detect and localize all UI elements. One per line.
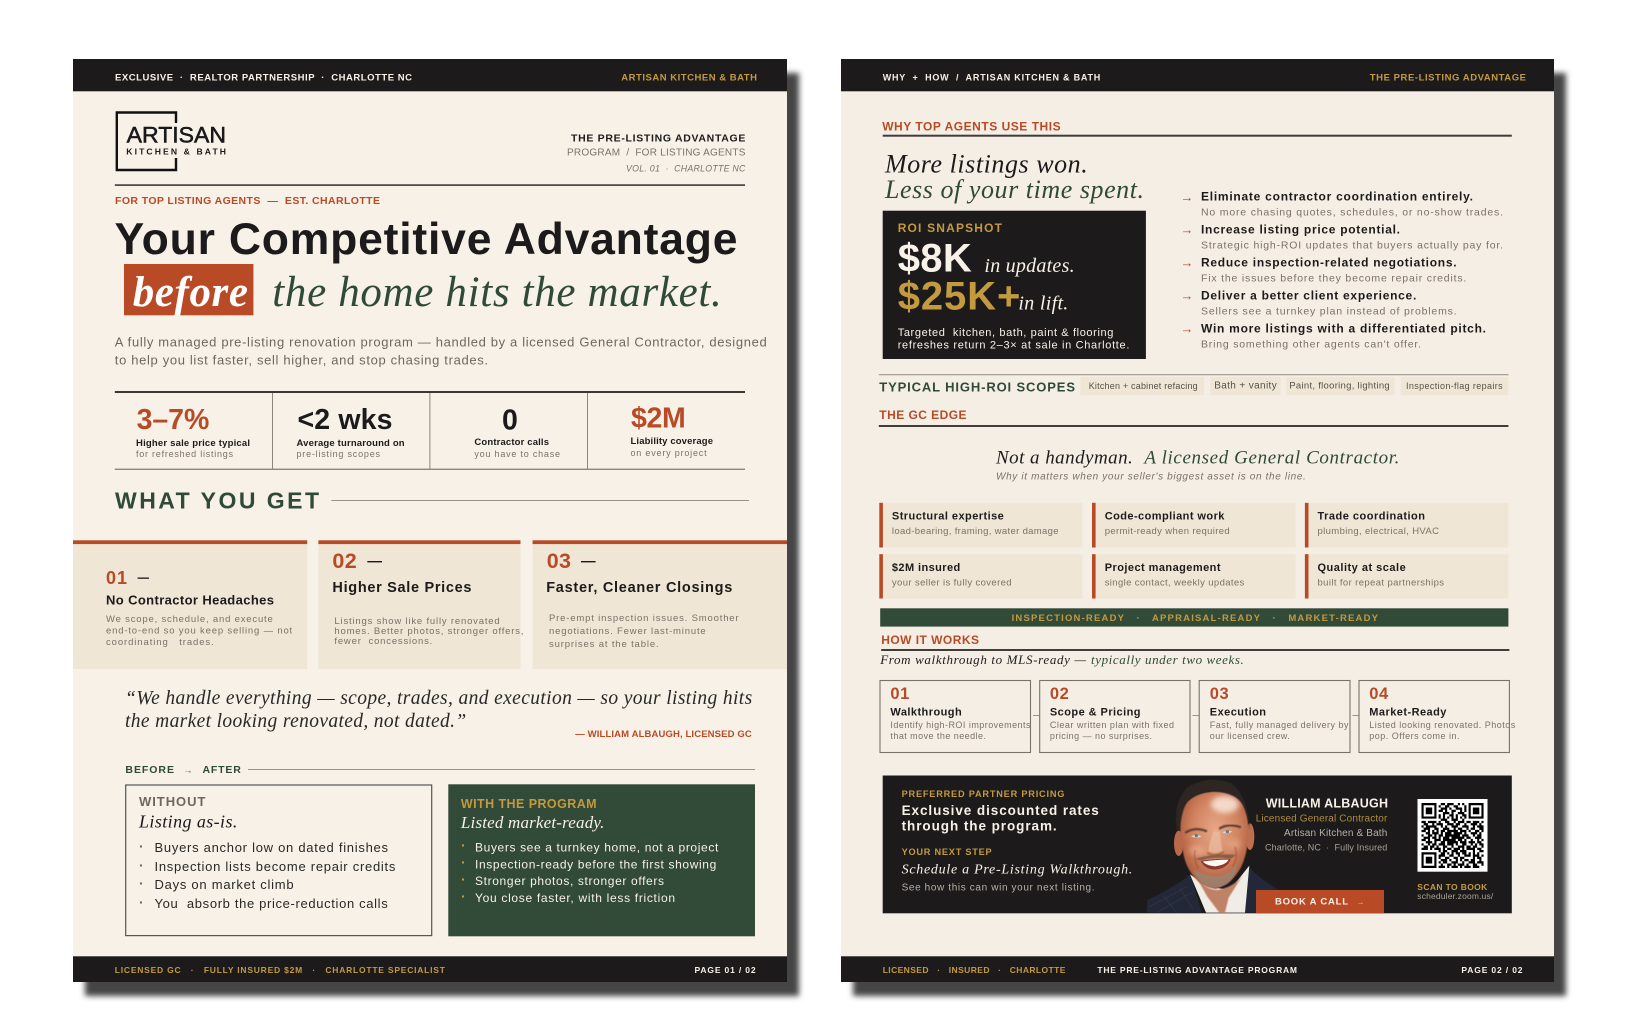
before after heading: BEFORE	[125, 764, 174, 776]
panel: ROI snapshot: $25K+	[898, 274, 1020, 318]
panel: with the program	[448, 784, 755, 936]
stat: under 2 weeks: pre-listing scopes	[296, 449, 380, 459]
bullet list: without: You absorb the price-reduction calls	[154, 896, 388, 911]
benefit 3: Reduce inspection-related negotiations.	[1201, 256, 1457, 270]
tagline: Less of your time spent.	[884, 175, 1144, 204]
step 02: Scope & Pricing	[1050, 706, 1140, 718]
scopes row	[879, 377, 1508, 395]
card 01: We scope, schedule, and execute	[106, 614, 273, 625]
stat: $2M: $2M	[631, 403, 686, 435]
masthead program text: PROGRAM / FOR LISTING AGENTS	[567, 147, 746, 158]
panel: ROI snapshot: Targeted kitchen, bath, paint & flooring	[898, 327, 1113, 339]
contact card text: Charlotte, NC · Fully Insured	[1265, 843, 1387, 853]
bullet list: without	[139, 838, 396, 911]
step 04: Listed looking renovated. Photos	[1369, 720, 1516, 730]
step 01: 01	[890, 685, 909, 703]
contact card text: Licensed General Contractor	[1256, 814, 1388, 825]
card: code: Code-compliant work	[1105, 511, 1225, 523]
card 02: 02	[332, 549, 357, 573]
bullet list: without: ·	[139, 894, 144, 910]
page 2 footer	[841, 956, 1554, 982]
scan to book caption: SCAN TO BOOK	[1417, 882, 1488, 892]
benefit 3: Fix the issues before they become repair credits.	[1201, 272, 1466, 284]
button: book a call: BOOK A CALL	[1275, 897, 1348, 908]
page 2 footer: LICENSED · INSURED · CHARLOTTE	[883, 965, 1066, 975]
bullet list: with: ·	[461, 854, 466, 870]
heading: how it works: HOW IT WORKS	[881, 633, 979, 647]
panel: ROI snapshot: refreshes return 2–3× at sale in Charlotte.	[898, 340, 1129, 352]
benefit 1: Eliminate contractor coordination entirely.	[1201, 190, 1473, 204]
step 03: Execution	[1210, 706, 1266, 718]
card 02: Listings show like fully renovated	[334, 616, 500, 627]
scope chip: bath: Bath + vanity	[1214, 381, 1277, 392]
card: insured: $2M insured	[892, 562, 960, 574]
stats row	[115, 391, 745, 470]
benefit 3: →	[1180, 255, 1194, 270]
panel: ROI snapshot: ROI SNAPSHOT	[898, 221, 1003, 235]
bullet list: with: Inspection-ready before the first showing	[475, 857, 716, 871]
pull quote: the market looking renovated, not dated.”	[125, 711, 466, 732]
card 01: end-to-end so you keep selling — not	[106, 625, 293, 636]
step 01: Walkthrough	[890, 706, 962, 718]
stat: $2M	[630, 403, 713, 458]
card 02: Higher Sale Prices	[332, 580, 472, 596]
step 02: 02	[1050, 685, 1069, 703]
stat: under 2 weeks: <2 wks	[298, 404, 392, 436]
card 02	[318, 540, 523, 669]
scope chip: inspection	[1401, 377, 1508, 395]
step 02: Clear written plan with fixed	[1050, 720, 1174, 730]
logo: Artisan Kitchen & Bath: ARTISAN	[127, 123, 226, 148]
step 01	[880, 680, 1031, 752]
benefit 2: →	[1180, 222, 1194, 237]
step 04: 04	[1369, 685, 1389, 703]
heading: how it works: From walkthrough to MLS-ready —	[879, 652, 1086, 667]
card: structural	[879, 503, 1082, 548]
step 03: our licensed crew.	[1210, 731, 1290, 741]
heading: why top agents: WHY TOP AGENTS USE THIS	[882, 119, 1061, 133]
bullet list: without: Days on market climb	[154, 877, 294, 892]
scope chip: paint	[1286, 377, 1394, 395]
pull quote: — WILLIAM ALBAUGH, LICENSED GC	[575, 729, 752, 740]
headline: Your Competitive Advantage	[114, 215, 738, 264]
panel: without the program: WITHOUT	[139, 794, 205, 809]
benefit 5: Bring something other agents can't offer.	[1201, 338, 1421, 350]
panel: ROI snapshot: $8K	[898, 237, 972, 281]
card: trade: Trade coordination	[1318, 511, 1425, 523]
before after heading: →	[183, 766, 193, 776]
contact card text: Artisan Kitchen & Bath	[1284, 828, 1387, 839]
bullet list: with: You close faster, with less friction	[475, 891, 675, 905]
pull quote	[125, 688, 752, 740]
benefit 1: →	[1180, 190, 1194, 204]
stat: zero calls: you have to chase	[474, 449, 560, 459]
intro paragraph: A fully managed pre-listing renovation program — handled by a licensed General Contractor, designed	[115, 334, 767, 349]
page 2 top bar: WHY + HOW / ARTISAN KITCHEN & BATH	[883, 72, 1100, 82]
heading: what you get: WHAT YOU GET	[115, 488, 319, 514]
step 01: Identify high-ROI improvements	[890, 720, 1031, 730]
logo: Artisan Kitchen & Bath: KITCHEN & BATH	[126, 146, 226, 156]
GC edge card grid	[879, 503, 1508, 598]
step 02: pricing — no surprises.	[1050, 731, 1152, 741]
card 03: surprises at the table.	[549, 639, 659, 650]
headline: the home hits the market.	[272, 269, 722, 316]
page 1 footer: LICENSED GC · FULLY INSURED $2M · CHARLOTTE SPECIALIST	[115, 965, 446, 975]
card: quality: built for repeat partnerships	[1318, 577, 1444, 588]
bullet list: with: ·	[461, 888, 466, 904]
button: book a call	[1256, 890, 1384, 913]
stat: under 2 weeks	[296, 404, 405, 459]
offer text: PREFERRED PARTNER PRICING	[902, 789, 1064, 799]
panel: without the program: Listing as-is.	[138, 811, 237, 831]
before after heading: AFTER	[202, 764, 241, 776]
scope chip: kitchen: Kitchen + cabinet refacing	[1089, 381, 1198, 391]
stat: zero calls: 0	[502, 405, 518, 437]
offer text: YOUR NEXT STEP	[902, 847, 992, 857]
page 2 footer: THE PRE-LISTING ADVANTAGE PROGRAM	[1097, 965, 1297, 975]
card 01	[73, 540, 307, 669]
panel: partner pricing banner	[883, 776, 1512, 913]
scope chip: bath	[1210, 377, 1281, 395]
bullet list: without: Buyers anchor low on dated finishes	[154, 840, 388, 855]
offer text	[902, 789, 1132, 893]
card 01: No Contractor Headaches	[106, 592, 274, 607]
GC edge statement	[995, 447, 1399, 482]
page 1 footer	[73, 956, 787, 982]
tagline: More listings won.	[884, 149, 1088, 178]
offer text: See how this can win your next listing.	[902, 882, 1094, 893]
arrow: step 1 to 2	[1033, 715, 1040, 716]
eyebrow: FOR TOP LISTING AGENTS — EST. CHARLOTTE	[115, 195, 380, 207]
masthead program text: VOL. 01 · CHARLOTTE NC	[626, 163, 746, 173]
page 1 top bar: ARTISAN KITCHEN & BATH	[621, 72, 757, 83]
step 03: Fast, fully managed delivery by	[1210, 720, 1349, 730]
benefit 4: →	[1180, 288, 1194, 303]
scopes row: TYPICAL HIGH-ROI SCOPES	[879, 380, 1075, 395]
card: project management: single contact, weekly updates	[1105, 577, 1245, 588]
benefits list	[1180, 190, 1503, 350]
scope chip: kitchen	[1080, 377, 1204, 395]
arrow: step 3 to 4	[1352, 715, 1359, 716]
contact card text	[1256, 797, 1388, 853]
step 04: pop. Offers come in.	[1369, 731, 1460, 741]
scan to book caption: scheduler.zoom.us/	[1417, 891, 1494, 901]
panel: with the program: Listed market-ready.	[460, 813, 604, 832]
panel: without the program	[126, 785, 432, 936]
stat: zero calls	[474, 405, 560, 459]
bullet list: with	[461, 837, 719, 905]
step 01: that move the needle.	[890, 731, 986, 741]
card 03: Pre-empt inspection issues. Smoother	[549, 613, 739, 624]
benefit 3	[1180, 255, 1466, 284]
stat: 3-7%	[136, 404, 250, 459]
page 1 footer: PAGE 01 / 02	[694, 965, 756, 975]
step 04	[1359, 680, 1516, 752]
step 02	[1040, 680, 1190, 752]
card 03: Faster, Cleaner Closings	[546, 580, 732, 596]
bullet list: without: ·	[139, 838, 144, 854]
heading: how it works	[879, 633, 1509, 667]
page 2 top bar	[841, 59, 1554, 91]
panel: with the program: WITH THE PROGRAM	[461, 797, 597, 811]
benefit 4	[1180, 288, 1457, 317]
card 03: negotiations. Fewer last-minute	[549, 626, 706, 637]
card: structural: load-bearing, framing, water damage	[892, 526, 1059, 537]
benefit 2	[1180, 222, 1503, 251]
masthead program text: THE PRE-LISTING ADVANTAGE	[571, 132, 745, 144]
card: structural: Structural expertise	[892, 511, 1004, 523]
benefit 5: Win more listings with a differentiated pitch.	[1201, 322, 1486, 336]
step 03	[1199, 680, 1350, 752]
page 2 top bar: THE PRE-LISTING ADVANTAGE	[1370, 72, 1526, 83]
card 03: 03	[547, 549, 571, 573]
headline: before	[133, 269, 248, 316]
bullet list: without: Inspection lists become repair credits	[154, 859, 396, 874]
step 03: 03	[1210, 685, 1229, 703]
heading: GC edge: THE GC EDGE	[879, 408, 966, 422]
scope chip: paint: Paint, flooring, lighting	[1289, 381, 1390, 392]
card: code	[1092, 503, 1296, 548]
benefit 1: No more chasing quotes, schedules, or no-show trades.	[1201, 206, 1503, 218]
card: project management: Project management	[1105, 562, 1221, 574]
masthead program text	[567, 132, 746, 173]
page 2 footer: PAGE 02 / 02	[1461, 965, 1523, 975]
GC edge statement: A licensed General Contractor.	[1142, 447, 1399, 468]
page 1 top bar	[73, 59, 787, 91]
page 1 top bar: EXCLUSIVE · REALTOR PARTNERSHIP · CHARLOTTE NC	[115, 72, 412, 83]
stat: 3-7%: 3–7%	[137, 404, 209, 436]
scan to book caption	[1417, 882, 1494, 901]
GC edge statement: Not a handyman.	[995, 447, 1133, 468]
QR code	[1418, 799, 1488, 872]
contact card text: WILLIAM ALBAUGH	[1266, 797, 1388, 811]
bullet list: with: Buyers see a turnkey home, not a project	[475, 840, 719, 854]
card: trade	[1305, 503, 1508, 548]
intro paragraph: to help you list faster, sell higher, and stop chasing trades.	[115, 352, 488, 367]
intro paragraph	[115, 334, 767, 367]
GC edge statement: Why it matters when your seller's biggest asset is on the line.	[996, 471, 1306, 482]
portrait: William Albaugh	[1147, 780, 1278, 913]
heading: how it works: typically under two weeks.	[1091, 652, 1244, 667]
card: quality: Quality at scale	[1318, 562, 1406, 574]
offer text: Schedule a Pre-Listing Walkthrough.	[902, 863, 1132, 878]
panel: ROI snapshot: in lift.	[1018, 292, 1068, 314]
offer text: Exclusive discounted rates	[902, 803, 1099, 818]
stat: under 2 weeks: Average turnaround on	[296, 438, 405, 449]
stat: zero calls: Contractor calls	[474, 437, 549, 448]
bullet list: with: ·	[461, 837, 466, 853]
card 01: 01	[106, 568, 127, 588]
card: quality	[1305, 554, 1508, 598]
card: code: permit-ready when required	[1105, 526, 1230, 537]
logo: Artisan Kitchen & Bath	[117, 112, 226, 170]
card 02: homes. Better photos, stronger offers,	[334, 626, 523, 637]
benefit 4: Sellers see a turnkey plan instead of problems.	[1201, 305, 1457, 317]
benefit 1	[1180, 190, 1503, 218]
panel: ROI snapshot: in updates.	[984, 255, 1075, 277]
benefit 2: Increase listing price potential.	[1201, 223, 1400, 237]
scope chip: inspection: Inspection-flag repairs	[1406, 381, 1503, 391]
card: insured	[879, 554, 1082, 598]
stat: $2M: Liability coverage	[630, 436, 713, 447]
step 04: Market-Ready	[1369, 706, 1447, 718]
stat: 3-7%: for refreshed listings	[136, 449, 234, 459]
tagline	[884, 149, 1144, 204]
card 02: fewer concessions.	[334, 636, 432, 647]
bullet list: without: ·	[139, 857, 144, 873]
page 1	[73, 59, 787, 982]
card: project management	[1092, 554, 1296, 598]
benefit 2: Strategic high-ROI updates that buyers actually pay for.	[1201, 239, 1503, 251]
page 2 drop shadow	[853, 73, 1566, 996]
card 03	[533, 540, 787, 669]
button: book a call: →	[1356, 898, 1364, 907]
panel: ROI snapshot	[883, 211, 1146, 359]
bullet list: with: ·	[461, 871, 466, 887]
headline	[114, 215, 738, 316]
ready band: INSPECTION-READY · APPRAISAL-READY · MARKET-READY	[1012, 613, 1379, 624]
before after heading	[125, 764, 755, 776]
stat: $2M: on every project	[630, 448, 707, 458]
benefit 5	[1180, 321, 1486, 350]
offer text: through the program.	[902, 818, 1057, 833]
card 01: coordinating trades.	[106, 637, 214, 648]
arrow: step 2 to 3	[1192, 715, 1199, 716]
ready band	[880, 608, 1508, 627]
stat: 3-7%: Higher sale price typical	[136, 438, 250, 449]
pull quote: “We handle everything — scope, trades, and execution — so your listing hits	[125, 688, 752, 709]
bullet list: with: Stronger photos, stronger offers	[475, 874, 664, 888]
page 2	[841, 59, 1554, 982]
card: trade: plumbing, electrical, HVAC	[1318, 526, 1439, 537]
bullet list: without: ·	[139, 875, 144, 891]
benefit 4: Deliver a better client experience.	[1201, 289, 1416, 303]
benefit 5: →	[1180, 321, 1194, 336]
card: insured: your seller is fully covered	[892, 577, 1012, 588]
process steps	[880, 680, 1516, 752]
page 1 drop shadow	[85, 73, 799, 996]
